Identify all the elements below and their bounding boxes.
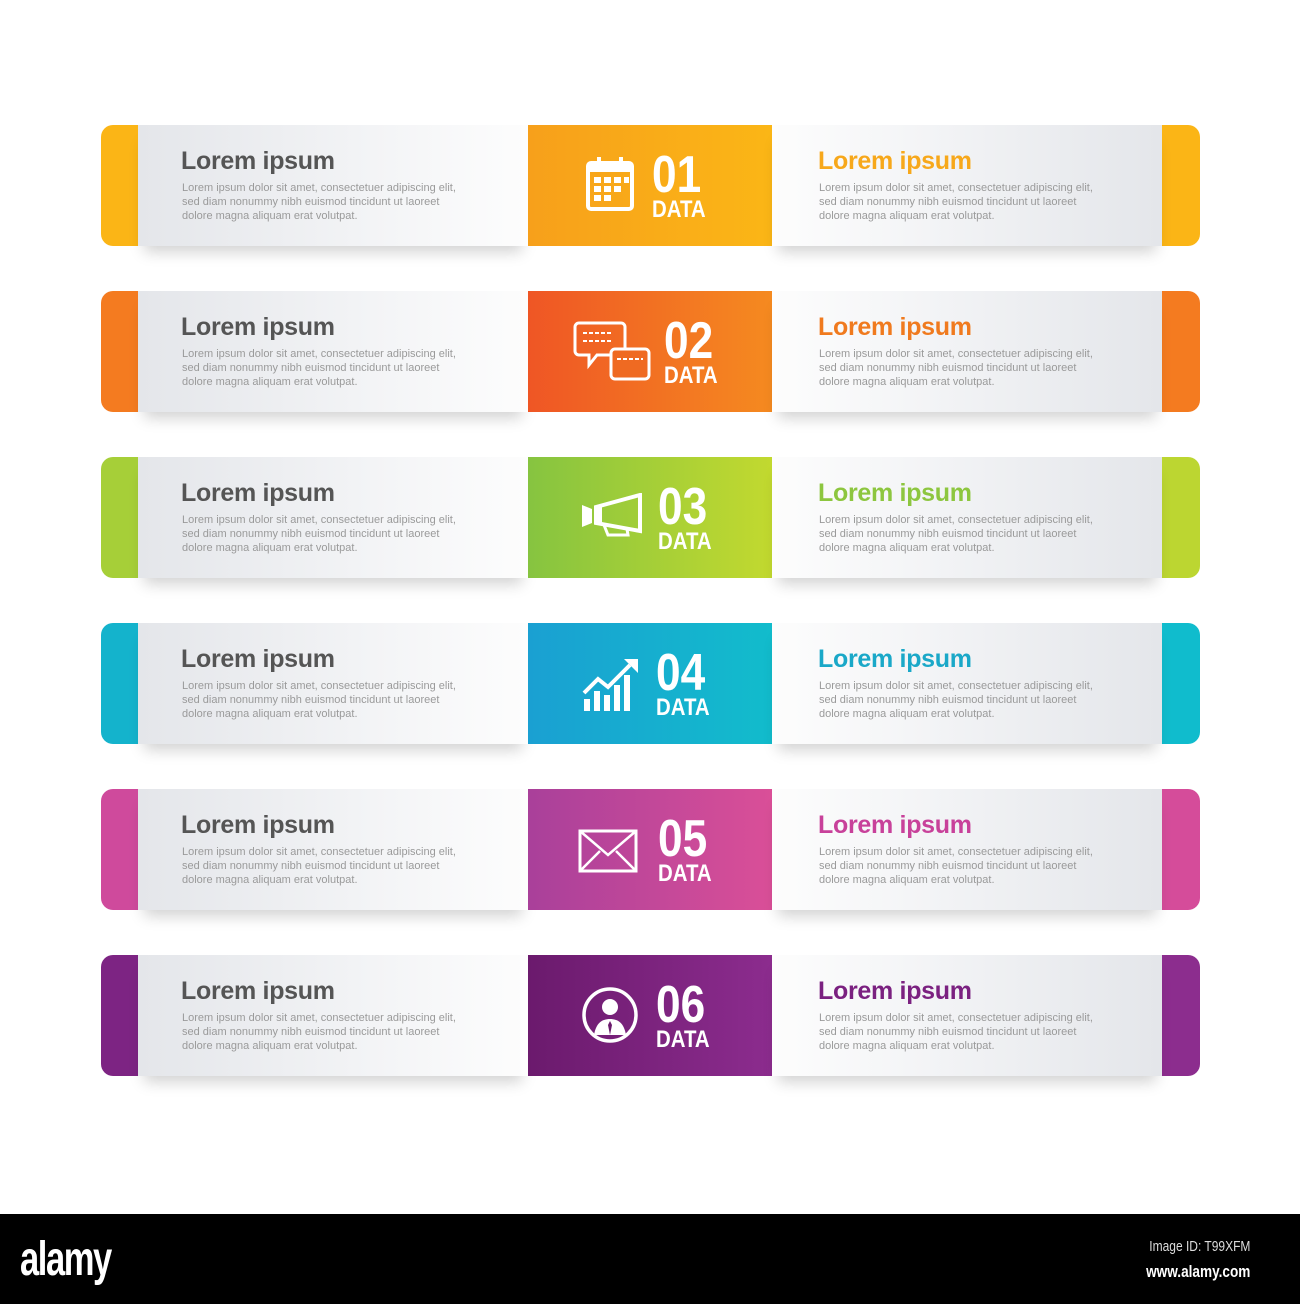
left panel 1: Lorem ipsum	[181, 147, 335, 175]
footer bar	[0, 1214, 1300, 1304]
left tab 1	[101, 125, 151, 246]
left tab 4	[101, 623, 151, 744]
right panel 4: Lorem ipsum	[818, 645, 972, 673]
number 04: 04	[656, 644, 705, 702]
left tab 6	[101, 955, 151, 1076]
center box 1	[528, 125, 772, 246]
right panel 6	[772, 955, 1162, 1076]
center box 3	[528, 457, 772, 578]
right panel 6: sed diam nonummy nibh euismod tincidunt ut laoreet	[819, 1026, 1076, 1038]
number 03: 03	[658, 478, 707, 536]
right panel 2: Lorem ipsum	[818, 313, 972, 341]
left panel 3: sed diam nonummy nibh euismod tincidunt ut laoreet	[182, 528, 439, 540]
left panel 3: Lorem ipsum dolor sit amet, consectetuer adipiscing elit,	[182, 514, 456, 526]
left panel 2: dolore magna aliquam erat volutpat.	[182, 376, 358, 388]
right panel 2: dolore magna aliquam erat volutpat.	[819, 376, 994, 388]
left panel 6: sed diam nonummy nibh euismod tincidunt ut laoreet	[182, 1026, 439, 1038]
right panel 6: Lorem ipsum dolor sit amet, consectetuer adipiscing elit,	[819, 1012, 1093, 1024]
left panel 3	[138, 457, 528, 578]
logo: alamy	[20, 1233, 111, 1286]
row 2	[101, 291, 1200, 424]
icon: envelope	[578, 830, 638, 872]
left panel 4: dolore magna aliquam erat volutpat.	[182, 708, 358, 720]
right panel 1: sed diam nonummy nibh euismod tincidunt ut laoreet	[819, 196, 1076, 208]
right panel 1	[772, 125, 1162, 246]
row 5	[101, 789, 1200, 922]
right panel 4	[772, 623, 1162, 744]
right tab 2	[1150, 291, 1200, 412]
right panel 1: Lorem ipsum dolor sit amet, consectetuer adipiscing elit,	[819, 182, 1093, 194]
left panel 6: Lorem ipsum dolor sit amet, consectetuer adipiscing elit,	[182, 1012, 456, 1024]
right panel 5: dolore magna aliquam erat volutpat.	[819, 874, 994, 886]
right tab 3	[1150, 457, 1200, 578]
left panel 4: Lorem ipsum dolor sit amet, consectetuer adipiscing elit,	[182, 680, 456, 692]
label DATA: DATA	[656, 1026, 710, 1053]
icon: chat bubbles	[574, 322, 650, 380]
left panel 1: dolore magna aliquam erat volutpat.	[182, 210, 358, 222]
right tab 4	[1150, 623, 1200, 744]
left panel 2: sed diam nonummy nibh euismod tincidunt ut laoreet	[182, 362, 439, 374]
right panel 1: Lorem ipsum	[818, 147, 972, 175]
right panel 5	[772, 789, 1162, 910]
row 6	[101, 955, 1200, 1088]
number 05: 05	[658, 810, 707, 868]
number 01: 01	[652, 146, 701, 204]
left panel 4: sed diam nonummy nibh euismod tincidunt ut laoreet	[182, 694, 439, 706]
left panel 5	[138, 789, 528, 910]
number 02: 02	[664, 312, 713, 370]
image id: Image ID: T99XFM	[1149, 1238, 1250, 1255]
label DATA: DATA	[664, 362, 718, 389]
left panel 5: Lorem ipsum	[181, 811, 335, 839]
center box 6	[528, 955, 772, 1076]
left panel 1: Lorem ipsum dolor sit amet, consectetuer adipiscing elit,	[182, 182, 456, 194]
left panel 2: Lorem ipsum dolor sit amet, consectetuer adipiscing elit,	[182, 348, 456, 360]
left panel 2	[138, 291, 528, 412]
left panel 6: Lorem ipsum	[181, 977, 335, 1005]
label DATA: DATA	[656, 694, 710, 721]
right panel 2: sed diam nonummy nibh euismod tincidunt ut laoreet	[819, 362, 1076, 374]
left panel 6: dolore magna aliquam erat volutpat.	[182, 1040, 358, 1052]
icon: megaphone	[582, 493, 642, 536]
right panel 4: sed diam nonummy nibh euismod tincidunt ut laoreet	[819, 694, 1076, 706]
right panel 5: Lorem ipsum	[818, 811, 972, 839]
number 06: 06	[656, 976, 705, 1034]
right tab 1	[1150, 125, 1200, 246]
right panel 1: dolore magna aliquam erat volutpat.	[819, 210, 994, 222]
icon: person circle	[582, 987, 638, 1043]
right panel 2: Lorem ipsum dolor sit amet, consectetuer adipiscing elit,	[819, 348, 1093, 360]
right panel 5: Lorem ipsum dolor sit amet, consectetuer adipiscing elit,	[819, 846, 1093, 858]
right panel 3	[772, 457, 1162, 578]
label DATA: DATA	[658, 860, 712, 887]
right panel 2	[772, 291, 1162, 412]
label DATA: DATA	[658, 528, 712, 555]
left panel 2: Lorem ipsum	[181, 313, 335, 341]
right panel 3: Lorem ipsum	[818, 479, 972, 507]
left panel 1: sed diam nonummy nibh euismod tincidunt ut laoreet	[182, 196, 439, 208]
right panel 4: dolore magna aliquam erat volutpat.	[819, 708, 994, 720]
left tab 2	[101, 291, 151, 412]
row 3	[101, 457, 1200, 590]
row 1	[101, 125, 1200, 258]
left panel 4	[138, 623, 528, 744]
right panel 5: sed diam nonummy nibh euismod tincidunt ut laoreet	[819, 860, 1076, 872]
url: www.alamy.com	[1146, 1262, 1250, 1281]
right panel 6: Lorem ipsum	[818, 977, 972, 1005]
right panel 3: sed diam nonummy nibh euismod tincidunt ut laoreet	[819, 528, 1076, 540]
left panel 5: dolore magna aliquam erat volutpat.	[182, 874, 358, 886]
right panel 4: Lorem ipsum dolor sit amet, consectetuer adipiscing elit,	[819, 680, 1093, 692]
right panel 3: dolore magna aliquam erat volutpat.	[819, 542, 994, 554]
icon: growth chart	[582, 659, 638, 711]
left panel 5: Lorem ipsum dolor sit amet, consectetuer adipiscing elit,	[182, 846, 456, 858]
left panel 3: dolore magna aliquam erat volutpat.	[182, 542, 358, 554]
center box 5	[528, 789, 772, 910]
right tab 6	[1150, 955, 1200, 1076]
left panel 5: sed diam nonummy nibh euismod tincidunt ut laoreet	[182, 860, 439, 872]
left panel 6	[138, 955, 528, 1076]
center box 2	[528, 291, 772, 412]
icon: calendar	[586, 157, 634, 211]
left panel 4: Lorem ipsum	[181, 645, 335, 673]
left tab 3	[101, 457, 151, 578]
row 4	[101, 623, 1200, 756]
left tab 5	[101, 789, 151, 910]
left panel 3: Lorem ipsum	[181, 479, 335, 507]
right tab 5	[1150, 789, 1200, 910]
left panel 1	[138, 125, 528, 246]
center box 4	[528, 623, 772, 744]
right panel 6: dolore magna aliquam erat volutpat.	[819, 1040, 994, 1052]
right panel 3: Lorem ipsum dolor sit amet, consectetuer adipiscing elit,	[819, 514, 1093, 526]
label DATA: DATA	[652, 196, 706, 223]
